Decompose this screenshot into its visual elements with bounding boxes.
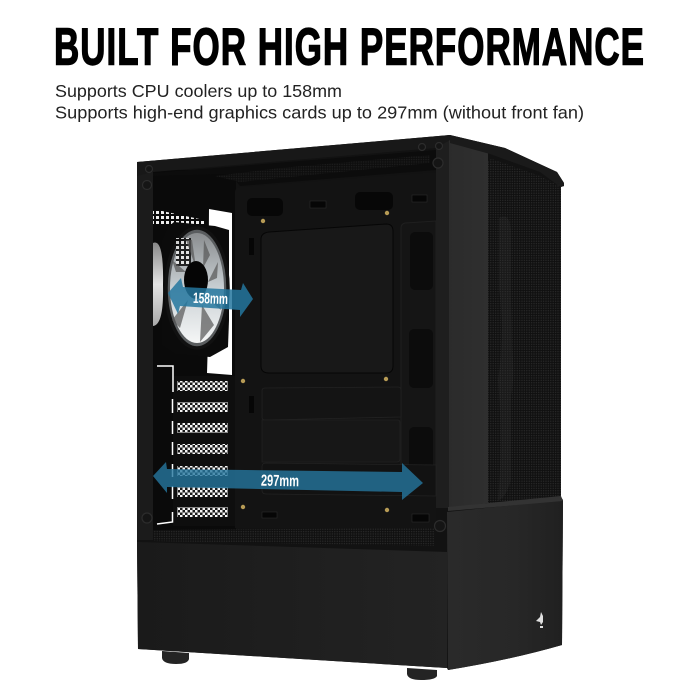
- fan inner area: [170, 233, 224, 343]
- top underside mesh: [153, 150, 436, 186]
- top rear vent holes: [153, 209, 204, 228]
- screw: [142, 180, 152, 190]
- top vent mesh: [215, 155, 430, 182]
- small port four: [412, 514, 429, 522]
- left foot: [162, 651, 189, 664]
- vent holes seen through blades: [176, 238, 191, 266]
- screws: [142, 142, 446, 532]
- vent row 3: [177, 423, 228, 433]
- top rail: [137, 135, 450, 176]
- logo mark: [536, 612, 543, 628]
- tray clip lower: [249, 396, 254, 413]
- vent row 2: [177, 402, 228, 412]
- fan shadows behind mesh: [498, 216, 513, 500]
- vent row 5: [177, 466, 228, 476]
- standoff: [385, 508, 389, 512]
- tray CPU cutout: [261, 224, 393, 373]
- small port three: [262, 512, 277, 518]
- lower tray plate 2: [262, 420, 400, 462]
- vent row 6: [177, 487, 228, 497]
- roof lip: [450, 135, 564, 187]
- arrow shape: [168, 278, 253, 317]
- front mesh panel: [488, 159, 561, 505]
- lower tray plate 3: [262, 463, 436, 496]
- cable cutout top right: [355, 192, 393, 210]
- case body silhouette: [137, 135, 564, 670]
- cable cutout top left: [247, 198, 283, 216]
- screw: [142, 513, 152, 523]
- expansion slot vents: [177, 381, 228, 517]
- right foot: [407, 668, 437, 680]
- brand logo: [536, 612, 543, 628]
- fan blades dark gaps: [172, 240, 221, 342]
- cable grommet lower: [409, 427, 433, 488]
- lower tray plate 1: [262, 387, 401, 420]
- motherboard tray: [235, 172, 436, 528]
- small port two: [412, 195, 427, 202]
- rear fan: [153, 222, 229, 357]
- lower front highlight edge: [448, 496, 563, 511]
- standoff: [241, 379, 245, 383]
- white window behind fan: [207, 209, 232, 375]
- standoff: [241, 505, 245, 509]
- interior cavity: [153, 170, 236, 530]
- subtitle line: CPU coolers: Supports CPU coolers up to 158mm: [55, 81, 342, 101]
- white slot edge highlights: [157, 366, 173, 524]
- fan housing: [162, 222, 229, 357]
- bottom mesh strip: [153, 528, 434, 546]
- brass standoffs: [241, 211, 389, 512]
- tray clip upper: [249, 238, 254, 255]
- screw: [418, 144, 426, 150]
- screw: [433, 158, 443, 168]
- expansion slot covers: [173, 376, 235, 526]
- base front panel: [137, 542, 447, 668]
- arrow shape: [153, 462, 423, 500]
- standoff: [261, 219, 265, 223]
- fan ring: [166, 228, 228, 348]
- small port one: [310, 201, 326, 208]
- standoff: [384, 377, 388, 381]
- fan hub: [184, 261, 208, 299]
- cable grommet middle: [409, 329, 433, 388]
- lower front section: [447, 500, 563, 670]
- left frame post: [137, 162, 153, 540]
- vent row 1: [177, 381, 228, 391]
- arrow: 158mm CPU cooler clearance: [168, 278, 253, 317]
- front frame column: [436, 135, 449, 508]
- side panel column: [448, 136, 488, 508]
- arrow label: 158mm: [193, 290, 228, 308]
- right tray plate: [401, 221, 436, 495]
- subtitle text block: [55, 81, 584, 122]
- vent row 4: [177, 444, 228, 454]
- arrow label: 297mm: [261, 473, 299, 490]
- standoff: [385, 211, 389, 215]
- subtitle line: graphics cards: Supports high-end graphics cards up to 297mm (without front fan): [55, 102, 584, 122]
- cable grommet upper: [410, 232, 433, 290]
- screw: [436, 142, 442, 150]
- arrow: 297mm graphics card clearance: [153, 462, 423, 500]
- screw: [146, 166, 152, 172]
- PC case: [137, 135, 564, 680]
- vent row 7: [177, 507, 228, 517]
- screw: [434, 520, 446, 532]
- lit side of rear fan: [153, 243, 163, 326]
